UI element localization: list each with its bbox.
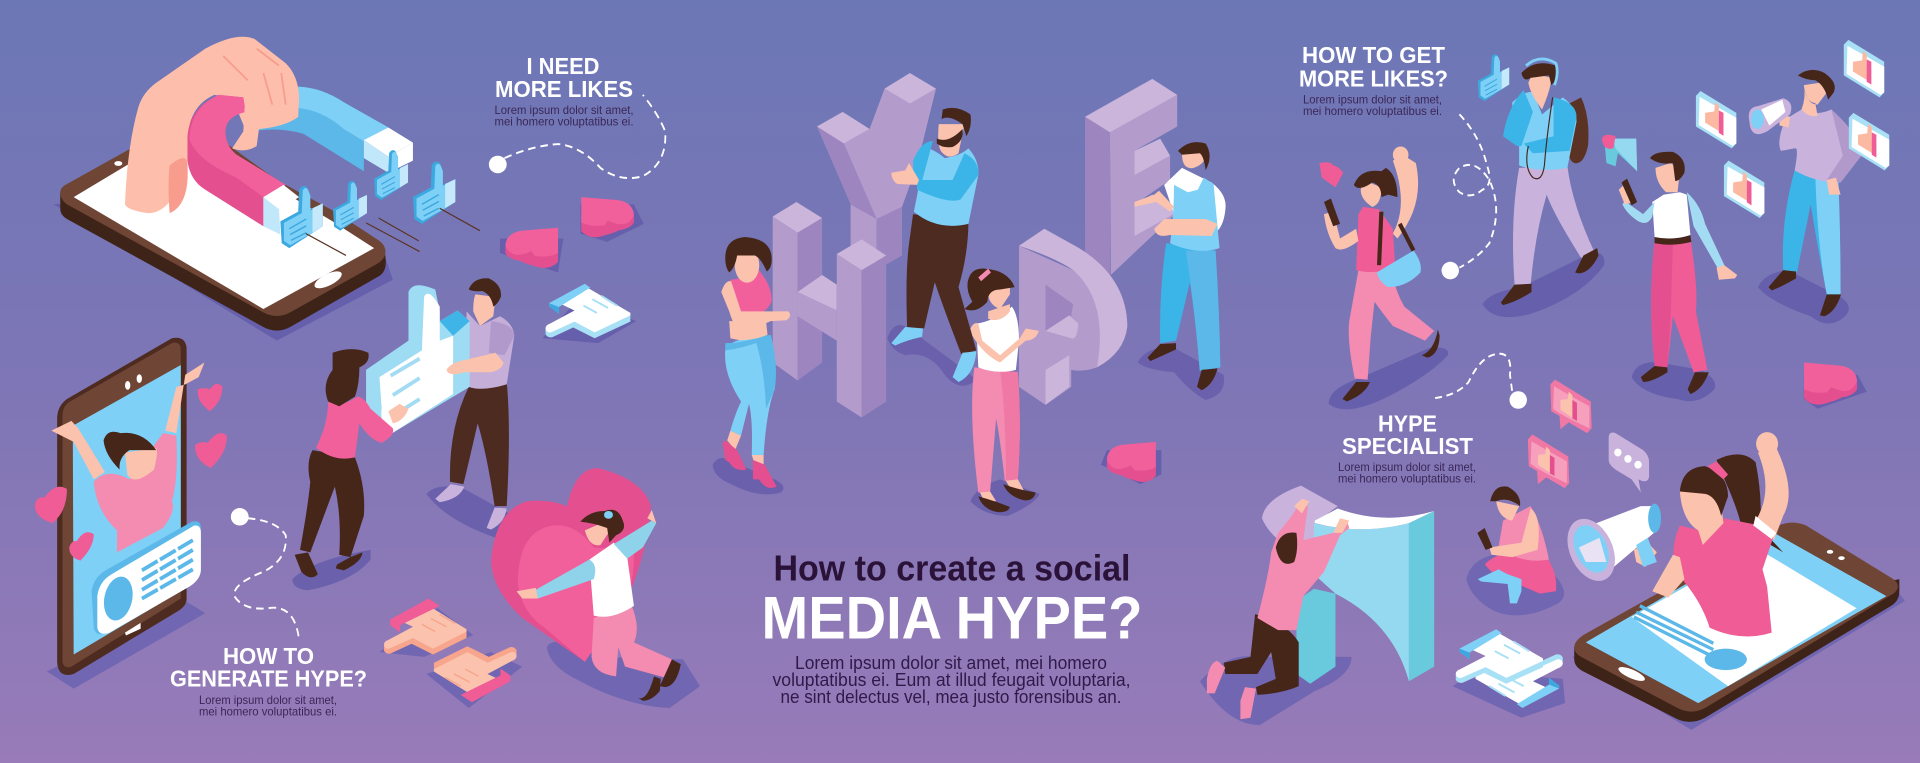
- heading: how to get more likes: HOW TO GET: [1302, 42, 1445, 68]
- heading: how to generate hype: mei homero voluptatibus ei.: [199, 704, 337, 718]
- heading: how to generate hype: GENERATE HYPE?: [170, 666, 367, 692]
- heading: I need more likes: I NEED: [526, 53, 600, 79]
- woman with megaphone: [1634, 432, 1789, 636]
- phone with magnet: [54, 37, 413, 341]
- sitting woman: [1466, 486, 1564, 615]
- heading: I need more likes: Lorem ipsum dolor sit amet,: [494, 103, 634, 117]
- woman carrying thumb: [292, 349, 408, 590]
- dashed line: I need more likes: [489, 95, 665, 178]
- woman with phone and pink trousers: [1619, 152, 1737, 401]
- icons: peach thumbs: [379, 599, 522, 708]
- icons: like cards: [1696, 40, 1889, 218]
- heart: [1804, 363, 1867, 409]
- panel: left illustrations: [35, 37, 700, 708]
- phone with megaphone woman: [1572, 523, 1905, 730]
- title body text: voluptatibus ei. Eum at illud feugait voluptaria,: [772, 670, 1130, 690]
- heading: hype specialist: SPECIALIST: [1342, 433, 1473, 459]
- heading: I need more likes: MORE LIKES: [495, 76, 633, 102]
- heart and kneeling woman: [491, 468, 700, 708]
- man holding thumb: [426, 278, 514, 538]
- hearts: [500, 197, 644, 273]
- letter Y: [817, 73, 936, 270]
- magnet blue arm: [250, 87, 388, 171]
- phone with waving woman: [47, 338, 205, 689]
- heading: how to generate hype: HOW TO: [223, 643, 314, 669]
- title: MEDIA HYPE?: [762, 584, 1142, 652]
- letter P: [1019, 229, 1127, 405]
- icon: pointing white hand: [542, 284, 636, 343]
- woman with H: [713, 237, 790, 494]
- N letter and kneeling woman: [1200, 486, 1434, 725]
- heading: how to get more likes: Lorem ipsum dolor sit amet,: [1303, 93, 1442, 107]
- heading: how to get more likes: [1299, 42, 1448, 118]
- icons: pointing white hands: [1453, 629, 1565, 718]
- hand: [125, 37, 299, 213]
- woman with P: [964, 269, 1040, 516]
- magnet pink arm: [188, 95, 286, 226]
- title: [762, 548, 1142, 652]
- man with headphones and backpack: [1482, 59, 1604, 317]
- heading: hype specialist: Lorem ipsum dolor sit amet,: [1338, 460, 1476, 474]
- heading: how to get more likes: MORE LIKES?: [1299, 66, 1448, 92]
- icons: speech bubbles: [1528, 380, 1649, 492]
- heading: I need more likes: [494, 53, 634, 128]
- man with megaphone: [1749, 70, 1861, 324]
- bearded man with Y: [887, 108, 978, 386]
- dashed line: how to generate hype: [231, 508, 299, 640]
- heading: I need more likes: mei homero voluptatibus ei.: [494, 114, 634, 128]
- title body text: [772, 653, 1130, 707]
- icons: flying blue thumbs: [280, 150, 480, 255]
- letter H: [773, 202, 886, 418]
- title body text: Lorem ipsum dolor sit amet, mei homero: [795, 653, 1107, 673]
- dashed line: hype specialist: [1435, 354, 1527, 409]
- big like thumb: [366, 285, 504, 436]
- heading: how to generate hype: Lorem ipsum dolor sit amet,: [199, 693, 337, 707]
- title: How to create a social: [774, 548, 1130, 588]
- panel: right illustrations: [1200, 40, 1905, 730]
- dashed line: how to get more likes: [1442, 114, 1496, 279]
- big megaphone: [1558, 504, 1661, 590]
- woman with shoulder bag: [1319, 146, 1448, 409]
- man with E: [1134, 142, 1226, 400]
- title body text: ne sint delectus vel, mea justo forensibus an.: [780, 687, 1122, 707]
- heading: hype specialist: mei homero voluptatibus ei.: [1338, 472, 1476, 486]
- heading: hype specialist: HYPE: [1378, 411, 1437, 437]
- heading: hype specialist: [1338, 411, 1476, 486]
- heading: how to generate hype: [170, 643, 367, 718]
- heading: how to get more likes: mei homero voluptatibus ei.: [1303, 104, 1442, 118]
- floating hearts: [35, 384, 227, 561]
- icon: thumb card: [1478, 54, 1509, 101]
- panel: central HYPE letters and people: [713, 73, 1226, 516]
- icon: small megaphone with thumb: [1602, 135, 1637, 171]
- letter E: [1085, 79, 1178, 275]
- heart: [1101, 442, 1161, 484]
